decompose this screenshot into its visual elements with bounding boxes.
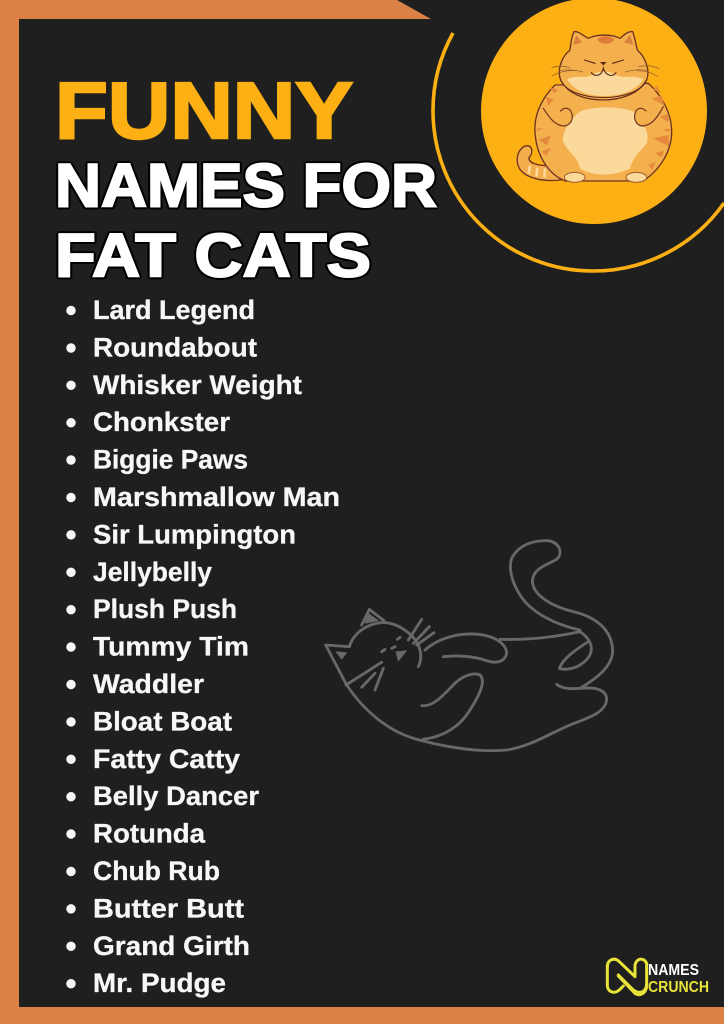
names: Bloat Boat bbox=[93, 706, 232, 736]
cat tail bbox=[517, 146, 561, 180]
title line: FAT CATS: FAT CATS bbox=[55, 222, 371, 290]
title line: NAMES FOR: NAMES FOR bbox=[55, 152, 437, 220]
names: Rotunda bbox=[93, 819, 205, 849]
bullets bbox=[66, 306, 76, 988]
names: Mr. Pudge bbox=[93, 968, 226, 998]
gold circle bbox=[481, 0, 707, 224]
names: Grand Girth bbox=[93, 931, 250, 961]
names: Whisker Weight bbox=[93, 370, 302, 400]
cat arms bbox=[543, 107, 663, 126]
list of cat names bbox=[66, 295, 340, 998]
logo: Names Crunch bbox=[607, 959, 709, 996]
names: Marshmallow Man bbox=[93, 482, 340, 512]
title line: FUNNY: FUNNY bbox=[55, 66, 353, 155]
cat muzzle bbox=[567, 71, 643, 96]
cat head bbox=[559, 32, 648, 100]
names: Belly Dancer bbox=[93, 781, 259, 811]
names: Biggie Paws bbox=[93, 445, 248, 475]
names: Tummy Tim bbox=[93, 632, 249, 662]
names: Chub Rub bbox=[93, 856, 220, 886]
cat ears and forehead mark bbox=[573, 35, 633, 45]
cat body bbox=[535, 83, 672, 181]
names: Chonkster bbox=[93, 407, 230, 437]
names: Butter Butt bbox=[93, 893, 244, 923]
names: Sir Lumpington bbox=[93, 519, 296, 549]
logo icon bbox=[607, 959, 647, 995]
cat feet bbox=[564, 172, 647, 182]
logo wordmark second line: CRUNCH bbox=[648, 979, 709, 996]
title bbox=[55, 66, 437, 290]
cat nose bbox=[600, 62, 607, 65]
names: Plush Push bbox=[93, 594, 237, 624]
cat belly bbox=[563, 107, 648, 175]
names: Roundabout bbox=[93, 332, 257, 362]
names: Lard Legend bbox=[93, 295, 255, 325]
names bbox=[93, 295, 340, 998]
names: Fatty Catty bbox=[93, 744, 240, 774]
icon: fat orange cat bbox=[517, 32, 672, 182]
title line: FAT CATS: FAT CATS bbox=[55, 222, 371, 290]
names: Waddler bbox=[93, 669, 204, 699]
cat face bbox=[552, 60, 659, 97]
logo wordmark: NAMES bbox=[648, 962, 699, 979]
cat stripes bbox=[537, 85, 670, 170]
names: Jellybelly bbox=[93, 557, 212, 587]
title line: NAMES FOR: NAMES FOR bbox=[55, 152, 437, 220]
icon: lying cat outline bbox=[326, 541, 613, 751]
gold ring bbox=[433, 33, 724, 271]
